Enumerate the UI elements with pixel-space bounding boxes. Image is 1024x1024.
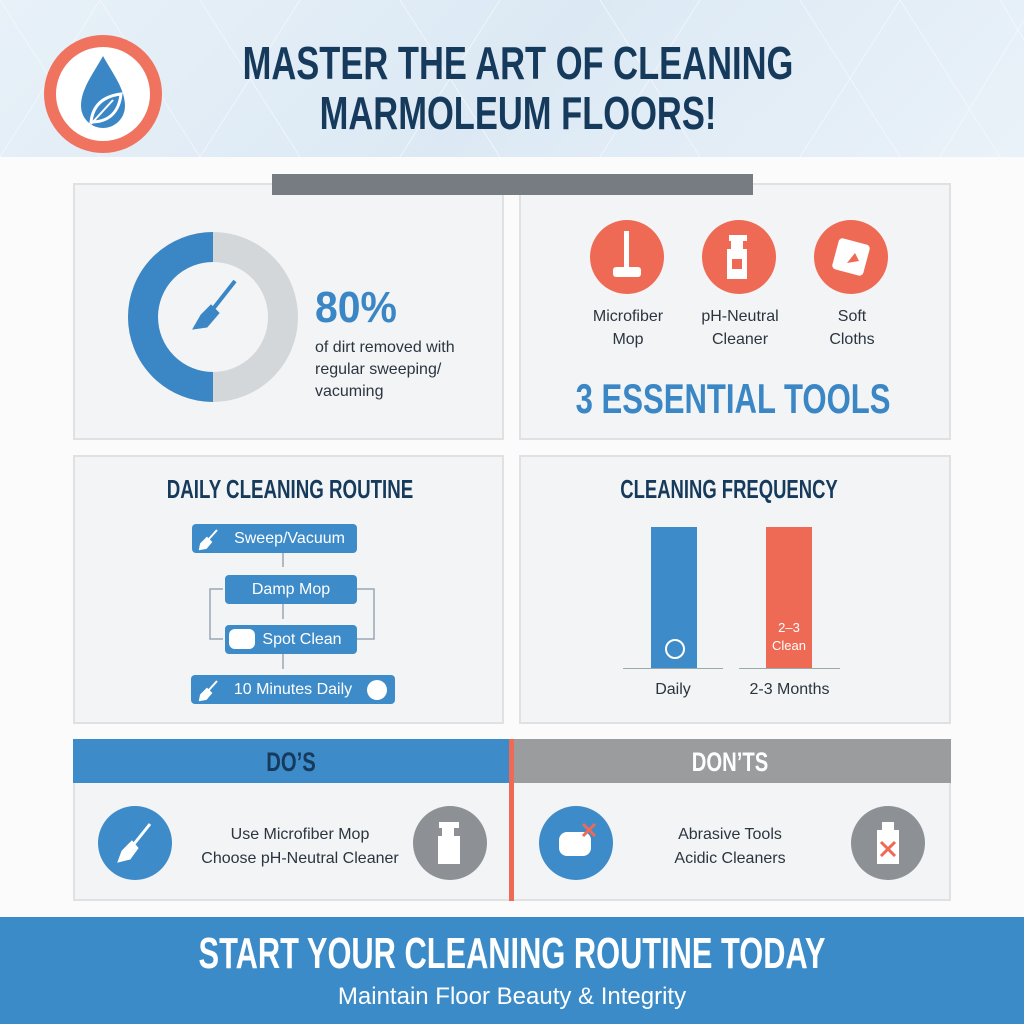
tool labels: Microfiber <box>593 308 663 325</box>
flowchart: Spot Clean <box>262 630 342 648</box>
title: MARMOLEUM FLOORS! <box>320 87 716 139</box>
do's text: Use Microfiber Mop <box>231 826 369 843</box>
panel: dirt statistic: of dirt removed with <box>315 339 455 356</box>
icon: sponge crossed <box>539 806 613 880</box>
bar chart: 2–3 <box>778 620 800 635</box>
icon: mop <box>590 220 664 294</box>
do's header: DO’S <box>267 747 316 777</box>
heading: DAILY CLEANING ROUTINE <box>167 474 413 504</box>
bar chart: 2-3 Months <box>749 681 830 698</box>
footer <box>0 917 1024 1024</box>
gray bar <box>272 174 753 195</box>
flowchart: 10 Minutes Daily <box>234 680 352 698</box>
don'ts text <box>674 826 786 867</box>
heading: CLEANING FREQUENCY <box>620 474 838 504</box>
bar chart: Daily <box>655 681 691 698</box>
title <box>243 37 793 139</box>
don'ts header <box>510 739 951 783</box>
donut chart <box>128 232 298 402</box>
panel: do's and don'ts <box>73 739 951 901</box>
tool labels <box>593 308 663 348</box>
divider <box>509 739 514 901</box>
flowchart <box>191 524 395 704</box>
icon: spray <box>702 220 776 294</box>
footer heading: START YOUR CLEANING ROUTINE TODAY <box>199 929 825 978</box>
panel: essential tools: Soft <box>838 308 866 325</box>
panel: cleaning frequency <box>519 455 951 724</box>
icon: spray bottle <box>413 806 487 880</box>
panel: dirt statistic: regular sweeping/ <box>315 361 441 378</box>
icon: cloth <box>814 220 888 294</box>
panel: dirt statistic: vacuming <box>315 383 383 400</box>
don'ts text: Acidic Cleaners <box>674 850 786 867</box>
flowchart: Sweep/Vacuum <box>234 530 345 546</box>
bar chart: Clean <box>772 638 806 653</box>
heading: 3 essential tools: 3 ESSENTIAL TOOLS <box>576 375 891 422</box>
icon: broom <box>98 806 172 880</box>
do's text: Choose pH-Neutral Cleaner <box>201 850 399 867</box>
panel: essential tools: pH-Neutral <box>701 308 779 325</box>
panel: essential tools <box>519 183 951 440</box>
header band <box>0 0 1024 157</box>
panel: essential tools: Cloths <box>829 331 875 348</box>
footer subtitle: Maintain Floor Beauty & Integrity <box>338 983 686 1010</box>
stat text: 80% <box>315 283 397 332</box>
logo icon: water drop with leaf <box>44 35 162 153</box>
don'ts header: DON’TS <box>692 747 769 777</box>
do's header <box>73 739 510 783</box>
icon: bottle crossed <box>851 806 925 880</box>
tool labels: Mop <box>612 331 644 348</box>
flowchart: Damp Mop <box>252 580 330 598</box>
do's text <box>201 826 399 867</box>
bar chart <box>623 527 840 698</box>
title: MASTER THE ART OF CLEANING <box>243 37 793 89</box>
don'ts text: Abrasive Tools <box>678 826 782 843</box>
panel: dirt statistic <box>73 183 504 440</box>
panel: daily cleaning routine <box>73 455 504 724</box>
panel: essential tools: Cleaner <box>712 331 768 348</box>
